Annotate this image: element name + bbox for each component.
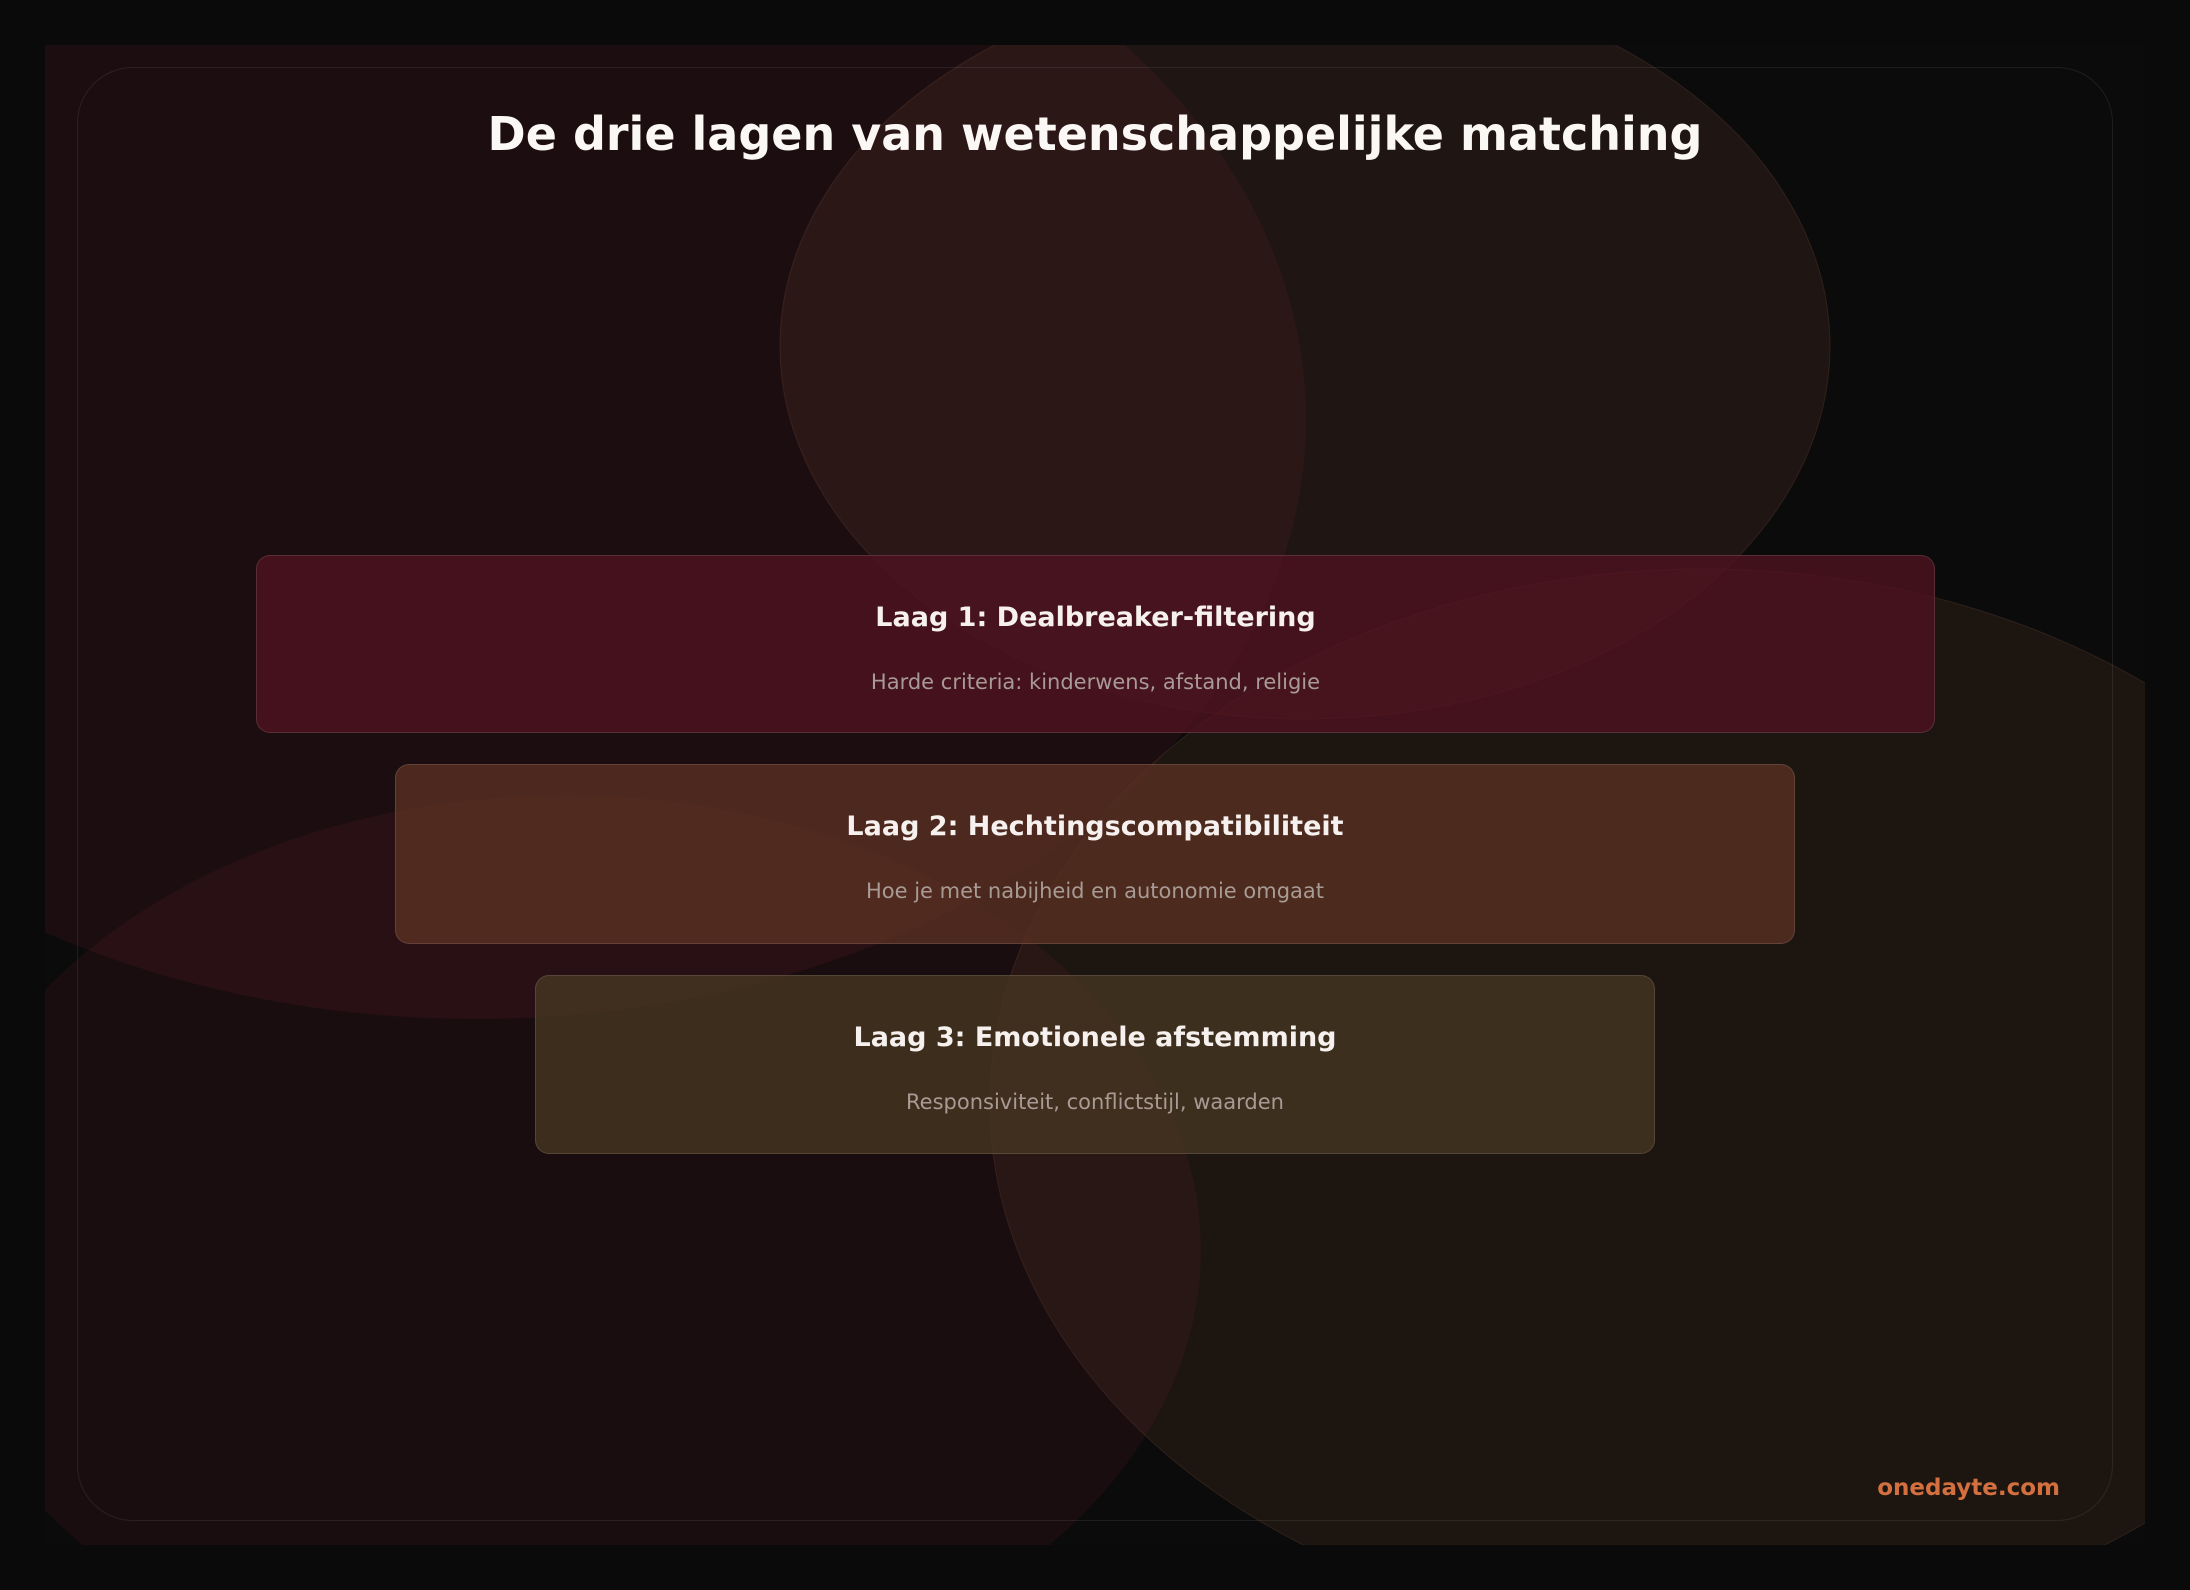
footer brand: onedayte.com [1877,1475,2060,1501]
panel: laag 2 [395,764,1795,944]
panel: laag 3 [535,975,1655,1154]
panel: laag 1 [256,555,1935,733]
heading: laag 2: Laag 2: Hechtingscompatibiliteit [846,811,1344,842]
heading: laag 1: Laag 1: Dealbreaker-filtering [875,602,1316,633]
text: laag 1: Harde criteria: kinderwens, afstand, religie [871,670,1320,694]
text: laag 3: Responsiviteit, conflictstijl, waarden [906,1090,1284,1114]
heading: laag 3: Laag 3: Emotionele afstemming [853,1022,1337,1053]
title: De drie lagen van wetenschappelijke matching [488,107,1702,161]
text: laag 2: Hoe je met nabijheid en autonomie omgaat [866,879,1324,903]
